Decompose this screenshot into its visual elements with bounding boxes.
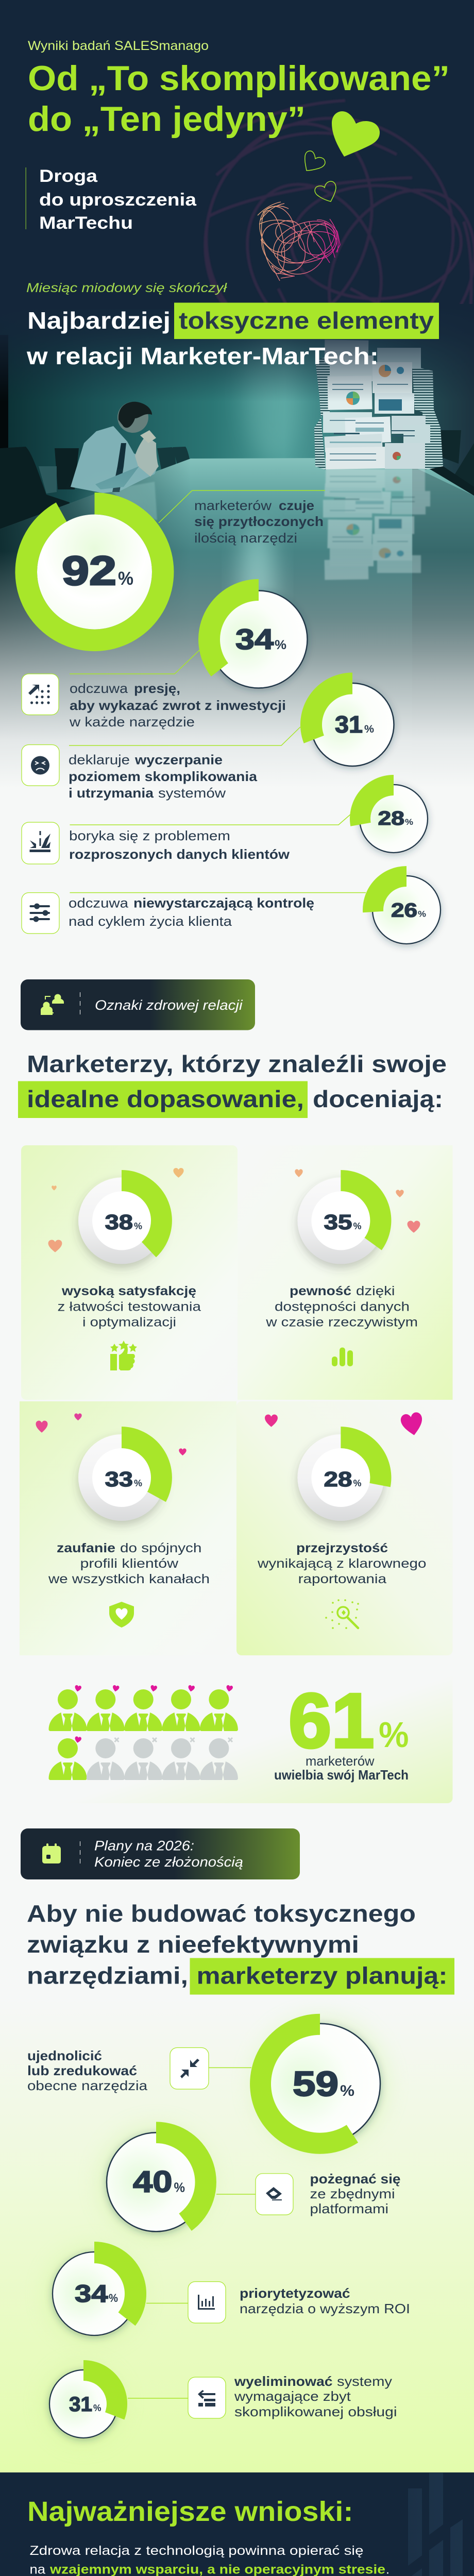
item: exhaustion (22, 745, 258, 801)
miesiąc miodowy: Miesiąc miodowy się skończył (26, 281, 228, 295)
icon: eraser (256, 2174, 293, 2215)
header background (0, 0, 474, 412)
card: 35% confidence: dzięki (356, 1284, 395, 1298)
card: 28% transparency (236, 1401, 452, 1655)
donut 33 (78, 1427, 172, 1521)
heading: to avoid a toxic relationship (27, 1900, 454, 1995)
icon: sliders (22, 893, 59, 934)
stat: 28%: 28 (378, 808, 404, 829)
stat: 34% prioritise: % (109, 2292, 118, 2304)
conclusions text (29, 2544, 417, 2576)
subtitle: road to simplification: MarTechu (39, 213, 133, 233)
stat: 31% eliminate: skomplikowanej obsługi (234, 2404, 397, 2419)
stat: 59% consolidate: lub zredukować (27, 2063, 137, 2078)
decorative bars (278, 2473, 463, 2576)
donut 38: % (134, 1221, 142, 1231)
stat: 31%: 31 (335, 711, 363, 738)
stat: 34% (70, 579, 307, 688)
stat: 59% consolidate: 59 (293, 2064, 338, 2104)
subtitle: road to simplification: do uproszczenia (39, 190, 197, 210)
stat: 31% eliminate: wymagające zbyt (234, 2388, 351, 2404)
stat: 92%: ilością narzędzi (194, 530, 297, 546)
item: exhaustion: systemów (158, 785, 226, 801)
plans background (0, 1999, 474, 2472)
stat: 28% (70, 775, 428, 853)
donut 35: 35 (324, 1210, 352, 1234)
heading: to avoid a toxic relationship: narzędziami, (27, 1962, 188, 1989)
stat: 31% eliminate: systemy (337, 2374, 392, 2389)
card: 38% high satisfaction: wysoką satysfakcję (61, 1284, 196, 1298)
stat: 92%: 92 (62, 548, 116, 594)
stat: 40% say goodbye (99, 2122, 401, 2239)
card: 38% high satisfaction: i optymalizacji (82, 1315, 176, 1329)
reflection (323, 468, 430, 580)
right chair (438, 430, 474, 496)
donut 35 (297, 1170, 391, 1264)
donut 38: 38 (105, 1210, 133, 1234)
stat: 40% say goodbye: platformami (310, 2201, 388, 2216)
icon: shield heart (109, 1602, 134, 1628)
card: 33% trust: profili klientów (80, 1556, 179, 1571)
stat: 92%: się przytłoczonych (194, 514, 324, 529)
card: 33% trust: we wszystkich kanałach (48, 1572, 210, 1586)
stat: 59% consolidate: obecne narzędzia (27, 2078, 148, 2093)
photo fades (0, 304, 474, 788)
heading: most toxic elements (26, 303, 439, 369)
subtitle: road to simplification (26, 166, 197, 233)
card: 61% love their MarTech: % (379, 1715, 409, 1755)
item: pressure for ROI: presję, (134, 681, 180, 696)
item: insufficient control (22, 893, 314, 934)
card: 61% love their MarTech: marketerów (306, 1753, 375, 1769)
item: insufficient control: niewystarczającą kontrolę (133, 895, 314, 911)
heading: most toxic elements: toksyczne elementy (179, 307, 434, 334)
card: 38% high satisfaction: z łatwości testowania (58, 1300, 201, 1314)
pill: signs of a healthy relationship (21, 979, 255, 1030)
item: scattered data: boryka się z problemem (69, 828, 230, 843)
icon: compress arrows (170, 2047, 209, 2089)
card: 35% confidence: pewność (290, 1284, 351, 1298)
item: pressure for ROI: w każde narzędzie (69, 714, 195, 730)
heading: marketers who found the ideal fit: Marketerzy, którzy znaleźli swoje (27, 1050, 447, 1077)
stat: 31% eliminate: % (93, 2403, 101, 2413)
card: 61% love their MarTech: 61 (289, 1677, 374, 1764)
stat: 31% eliminate (43, 2360, 397, 2444)
heading: most toxic elements: Najbardziej (27, 307, 171, 334)
icon: arrow and dots (22, 674, 59, 715)
heading: marketers who found the ideal fit: idealne dopasowanie, (27, 1086, 304, 1112)
table (0, 458, 474, 788)
card: 28% transparency: przejrzystość (296, 1541, 388, 1555)
stat: 92% (15, 490, 325, 651)
man (71, 402, 159, 493)
stat: 59% consolidate (27, 2014, 387, 2154)
donut 35: % (353, 1221, 362, 1231)
item: exhaustion: i utrzymania (69, 785, 154, 801)
conclusions text: Zdrowa relacja z technologią powinna opierać się (30, 2544, 364, 2558)
hearts (48, 1168, 184, 1252)
stat: 26% (70, 866, 441, 944)
hearts (36, 1413, 187, 1455)
stat: 34%: % (275, 638, 286, 652)
item: exhaustion: wyczerpanie (134, 752, 223, 768)
pill: plans for 2026: Koniec ze złożonością (94, 1854, 243, 1870)
far chairs (0, 447, 191, 529)
stat: 34% prioritise: 34 (75, 2280, 108, 2307)
item: pressure for ROI: aby wykazać zwrot z inwestycji (70, 698, 286, 713)
icon: scribble heart (252, 202, 341, 283)
pill: plans for 2026 (21, 1828, 300, 1879)
stat: 40% say goodbye: pożegnać się (310, 2171, 401, 2187)
stat: 26%: % (418, 909, 426, 919)
icon: people exchange (41, 994, 64, 1015)
card: 61% love their MarTech: uwielbia swój MarTech (274, 1767, 409, 1783)
icon: angry face (22, 745, 59, 786)
icon: magnifier (325, 1599, 359, 1629)
donut 33: 33 (105, 1467, 133, 1491)
pill: signs of a healthy relationship: Oznaki zdrowej relacji (95, 997, 243, 1013)
hearts (295, 1169, 420, 1233)
item: scattered data (22, 822, 290, 864)
stat: 34%: 34 (235, 623, 274, 655)
icon: thumbs up with stars (110, 1341, 137, 1370)
heading: to avoid a toxic relationship: marketerzy planują: (197, 1962, 447, 1989)
title (28, 59, 450, 139)
hearts (265, 1412, 425, 1437)
item: pressure for ROI (22, 674, 286, 730)
subtitle: road to simplification: Droga (39, 166, 98, 186)
item: scattered data: rozproszonych danych klientów (69, 846, 290, 862)
icon: bars (332, 1348, 353, 1366)
stat: 31% (69, 673, 394, 766)
heading: marketers who found the ideal fit (18, 1050, 447, 1118)
stat: 40% say goodbye: ze zbędnymi (310, 2186, 395, 2201)
card: 33% trust (20, 1401, 236, 1655)
stat: 92%: marketerów (194, 498, 272, 513)
stat: 34% prioritise (45, 2242, 410, 2343)
card: 61% love their MarTech (21, 1661, 452, 1803)
man's reflection (110, 482, 157, 520)
card: 38% high satisfaction (21, 1145, 238, 1400)
icon: calendar (42, 1843, 61, 1863)
stat: 59% consolidate: % (340, 2082, 354, 2099)
pill: plans for 2026: Plany na 2026: (94, 1838, 194, 1854)
stat: 31% eliminate: wyeliminować (234, 2374, 333, 2389)
icon: bar chart (188, 2282, 226, 2323)
item: exhaustion: poziomem skomplikowania (69, 769, 258, 784)
stat: 92%: % (118, 568, 133, 589)
heading: most toxic elements: w relacji Marketer-MarTech: (26, 343, 379, 369)
card: 33% trust: do spójnych (120, 1541, 201, 1555)
card: 28% transparency: raportowania (298, 1572, 386, 1586)
item: exhaustion: deklaruje (69, 752, 130, 768)
faint large scribble heart (177, 95, 474, 382)
donut 28: 28 (324, 1467, 352, 1491)
subtitle: survey results: Wyniki badań SALESmanago (28, 39, 209, 53)
stack edges (314, 355, 443, 470)
item: insufficient control: odczuwa (69, 895, 129, 911)
heading: marketers who found the ideal fit: doceniają: (313, 1086, 443, 1112)
heading: to avoid a toxic relationship: związku z nieefektywnymi (27, 1931, 359, 1958)
donut 28 (297, 1427, 391, 1521)
stat: 26%: 26 (391, 900, 417, 921)
stat: 92%: czuje (279, 498, 314, 513)
photo: man at conference table with stack of reports (0, 309, 474, 788)
item: pressure for ROI: odczuwa (70, 681, 128, 696)
item: insufficient control: nad cyklem życia klienta (69, 913, 232, 929)
title: Od „To skomplikowane” (28, 59, 450, 98)
stat: 40% say goodbye: 40 (133, 2165, 172, 2199)
title: do „Ten jedyny” (28, 99, 306, 139)
stat: 34% prioritise: narzędzia o wyższym ROI (240, 2301, 410, 2316)
donut 38 (78, 1170, 172, 1264)
stat: 59% consolidate: ujednolicić (27, 2048, 102, 2063)
conclusions panel (0, 2472, 474, 2576)
card: 33% trust: zaufanie (57, 1541, 115, 1555)
icon: list with arrow (188, 2377, 226, 2418)
card: 35% confidence: dostępności danych (275, 1300, 410, 1314)
card: 35% confidence (238, 1145, 452, 1400)
people pictogram (48, 1685, 238, 1780)
stat: 34% prioritise: priorytetyzować (240, 2285, 350, 2301)
stat: 40% say goodbye: % (174, 2179, 185, 2195)
icon: hearts (305, 111, 380, 201)
card: 35% confidence: w czasie rzeczywistym (265, 1315, 418, 1329)
icon: burst (22, 822, 59, 864)
stat: 31%: % (364, 723, 374, 735)
donut 33: % (134, 1478, 142, 1488)
heading: conclusions: Najważniejsze wnioski: (27, 2496, 353, 2527)
donut 28: % (353, 1478, 362, 1488)
card: 28% transparency: wynikającą z klarownego (257, 1556, 427, 1571)
stat: 31% eliminate: 31 (69, 2393, 92, 2416)
heading: to avoid a toxic relationship: Aby nie budować toksycznego (27, 1900, 416, 1927)
stat: 28%: % (405, 817, 413, 827)
